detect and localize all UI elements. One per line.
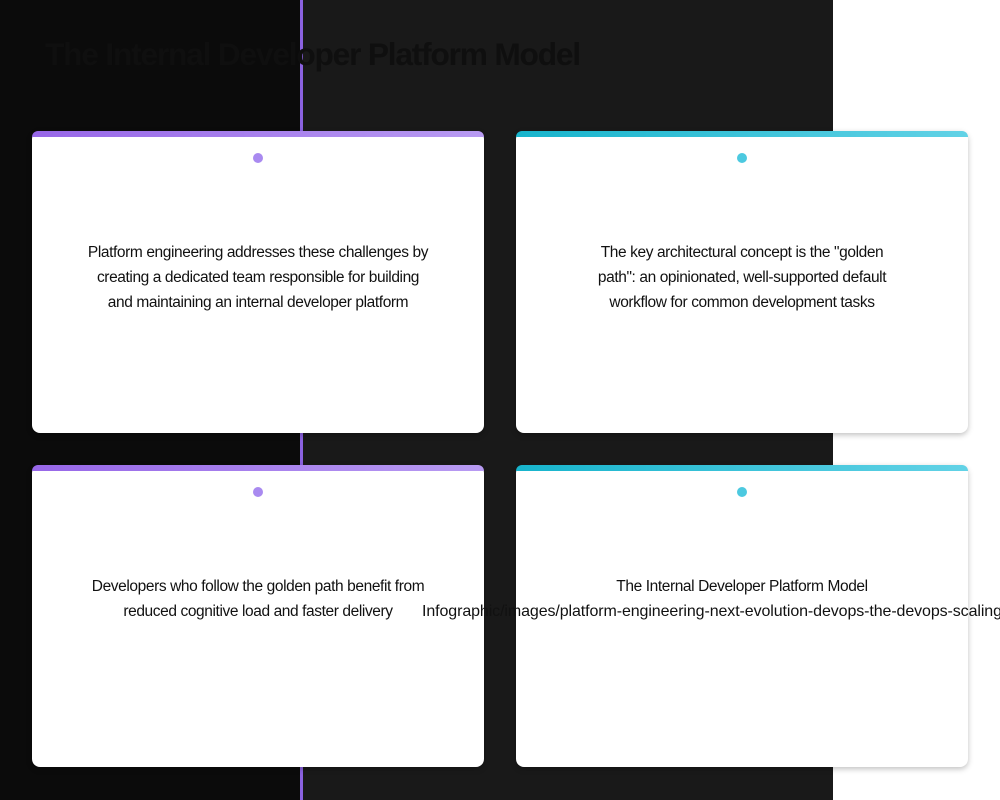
text block: Platform engineering addresses these challenges by (88, 244, 428, 261)
icon: dot (737, 153, 747, 163)
title: The Internal Developer Platform Model (45, 36, 580, 72)
text block: reduced cognitive load and faster delivery (123, 603, 393, 620)
icon: dot (737, 487, 747, 497)
icon: dot (253, 487, 263, 497)
text: path: Infographic/images/platform-engineering-next-evolution-devops-the-devops-scaling (422, 603, 1000, 620)
card: golden path (516, 131, 968, 433)
card: platform engineering (32, 131, 484, 433)
text block: and maintaining an internal developer platform (108, 294, 408, 311)
text block: The key architectural concept is the "golden (601, 244, 883, 261)
text block: Developers who follow the golden path benefit from (92, 578, 424, 595)
text block (88, 244, 428, 311)
text block: path": an opinionated, well-supported default (598, 269, 886, 286)
card: model (516, 465, 968, 767)
text block: workflow for common development tasks (609, 294, 875, 311)
card: developers benefit (32, 465, 484, 767)
text block (92, 578, 424, 620)
icon: dot (253, 153, 263, 163)
text block: The Internal Developer Platform Model (616, 578, 868, 595)
text block: creating a dedicated team responsible for building (97, 269, 419, 286)
text block (598, 244, 886, 311)
